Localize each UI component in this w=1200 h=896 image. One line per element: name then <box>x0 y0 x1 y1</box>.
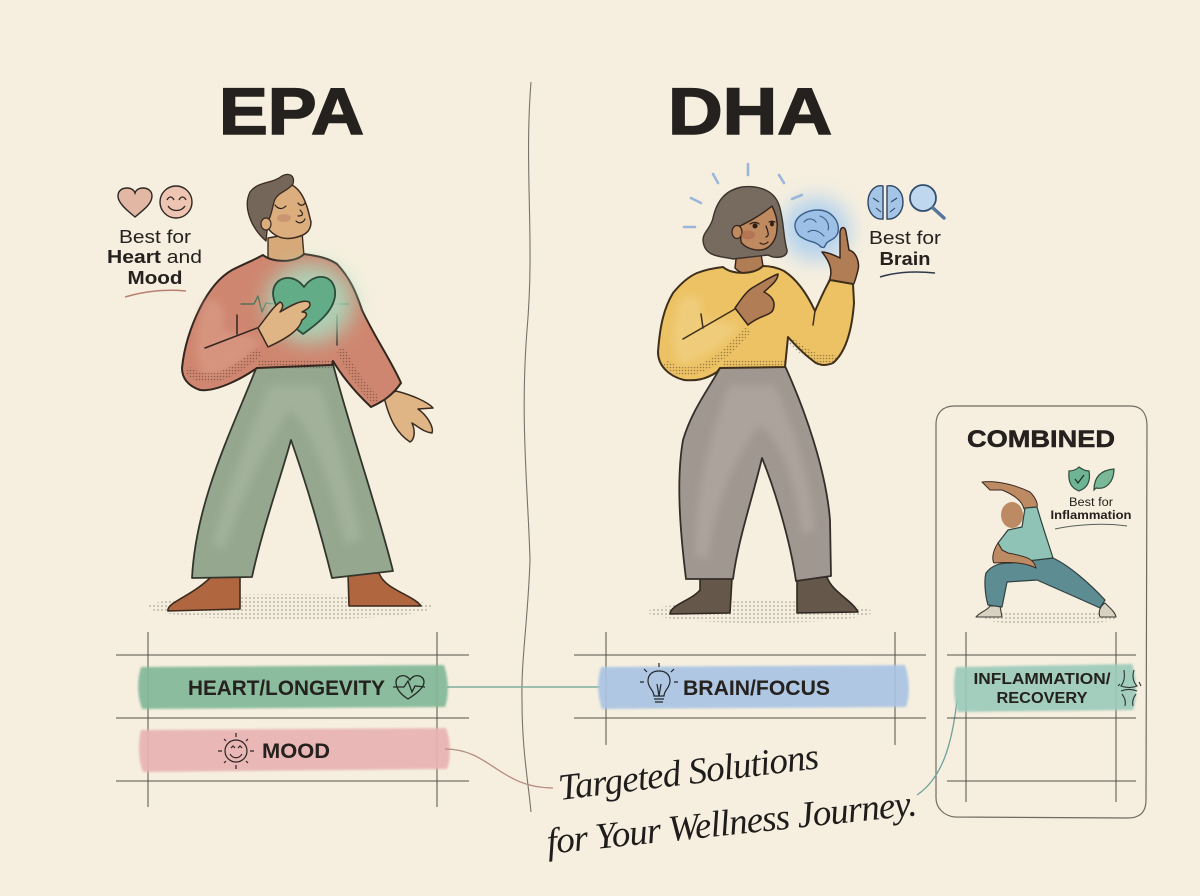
hair <box>247 174 293 241</box>
divider line <box>522 82 531 812</box>
icon: light bulb <box>640 663 678 702</box>
neck <box>735 248 763 274</box>
text: Inflammation: Inflammation <box>1050 510 1132 522</box>
text: Best for: Best for <box>869 227 941 248</box>
icon: joint <box>1118 670 1141 706</box>
left boot <box>670 578 732 614</box>
bar: heart longevity <box>138 665 448 709</box>
connector: mood to tagline <box>445 749 553 788</box>
hair <box>703 187 787 259</box>
torso <box>998 507 1053 563</box>
ear <box>261 218 271 230</box>
bar: brain focus <box>598 663 909 709</box>
ear <box>732 226 742 238</box>
glowing heart <box>273 277 335 334</box>
underline <box>1055 524 1127 529</box>
label: HEART/LONGEVITY <box>188 677 385 700</box>
text: Heart and: Heart and <box>107 246 202 267</box>
feet <box>976 603 1116 617</box>
combined grid <box>947 632 1141 802</box>
EPA callout <box>107 186 202 297</box>
combined figure <box>976 482 1116 625</box>
bent arm <box>993 543 1036 568</box>
tagline line 1: Targeted Solutions <box>556 736 821 809</box>
trousers <box>985 558 1105 608</box>
idea rays <box>684 164 802 227</box>
sweater <box>658 266 854 380</box>
hand on heart <box>258 301 310 347</box>
icon: leaf <box>1094 469 1114 490</box>
text: Best for: Best for <box>1069 497 1113 509</box>
ground shadow <box>648 601 872 623</box>
DHA callout <box>868 185 944 277</box>
text: Brain: Brain <box>880 248 930 269</box>
heading: combined: COMBINED <box>967 426 1115 453</box>
icon: heartbeat <box>393 676 425 699</box>
icon: magnifier <box>910 185 944 218</box>
face <box>265 185 311 238</box>
connector: heart to brain <box>447 686 600 688</box>
text: Best for: Best for <box>119 226 191 247</box>
neck <box>268 232 304 265</box>
right boot <box>348 573 421 606</box>
panel outline <box>936 406 1147 818</box>
panel: combined <box>936 406 1147 818</box>
sleeve halftone <box>668 332 832 371</box>
EPA grid <box>116 632 469 807</box>
icon: heart <box>118 188 152 217</box>
trouser wash <box>695 385 815 560</box>
sleeve line <box>683 309 815 339</box>
heart glow <box>266 263 354 343</box>
EPA figure <box>148 174 433 620</box>
face details <box>750 221 775 244</box>
tagline line 2: for Your Wellness Journey. <box>545 783 919 863</box>
face <box>740 206 777 250</box>
trousers <box>679 366 831 581</box>
head <box>1001 502 1023 528</box>
ground shadow <box>984 611 1116 625</box>
sleeve halftone <box>190 352 374 398</box>
ground shadow <box>148 594 432 620</box>
face details <box>275 203 305 223</box>
cheek <box>741 230 755 240</box>
left boot <box>168 575 240 611</box>
cheek <box>277 214 291 222</box>
bar: mood <box>139 728 450 772</box>
raised hand <box>822 228 859 285</box>
label: BRAIN/FOCUS <box>683 677 830 700</box>
icon: shield <box>1069 467 1090 491</box>
brain glow <box>782 197 850 261</box>
right boot <box>797 577 858 613</box>
heartbeat line <box>241 296 348 312</box>
icon: sun face <box>218 733 254 769</box>
connector: tagline to inflammation <box>917 700 957 795</box>
raised arm <box>982 482 1037 509</box>
DHA figure <box>648 164 872 623</box>
pointing hand <box>735 274 778 325</box>
label: INFLAMMATION/ <box>974 671 1111 688</box>
label line 2: RECOVERY <box>996 690 1088 707</box>
title: EPA: EPA <box>219 74 364 148</box>
trousers <box>192 364 393 578</box>
label: MOOD <box>262 740 330 763</box>
tagline <box>545 736 919 863</box>
icon: smile <box>160 186 192 218</box>
sweater highlight <box>673 296 740 365</box>
trouser wash <box>212 385 362 550</box>
glowing brain <box>795 210 838 248</box>
sweater <box>182 254 401 407</box>
DHA grid <box>574 632 926 745</box>
icon: brain <box>868 186 903 219</box>
sweater highlight <box>196 299 262 378</box>
underline <box>880 272 935 277</box>
text: Mood: Mood <box>128 267 182 288</box>
sleeve line <box>205 315 337 348</box>
underline <box>125 290 186 297</box>
right hand <box>384 391 433 442</box>
title: DHA: DHA <box>668 74 832 148</box>
bar: inflammation recovery <box>954 664 1141 712</box>
